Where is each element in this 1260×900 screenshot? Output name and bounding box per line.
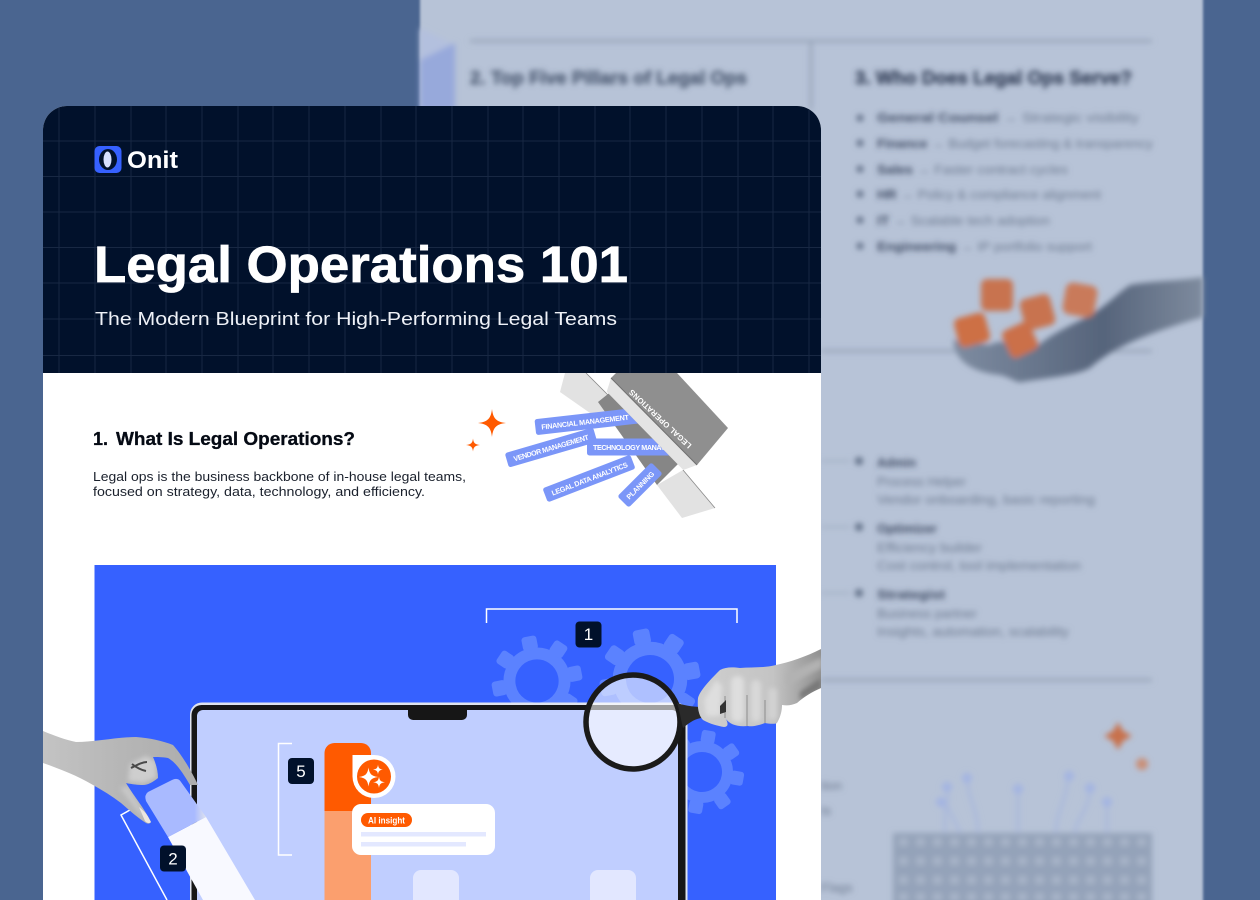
text block: definition: Legal ops is the business backbone of in-house legal teams,: [93, 470, 466, 484]
tab: technology management: TECHNOLOGY MANAGEMENT: [593, 443, 691, 452]
list: maturity stages: Process Helper: [877, 474, 967, 489]
folder front flap: [607, 378, 697, 470]
list: who legal ops serves: HR → Policy & compliance alignment: [877, 187, 1101, 202]
list: maturity stages: Cost control, tool implementation: [877, 558, 1081, 573]
list: maturity stages: Business partner: [877, 606, 978, 621]
icon: gears: [492, 628, 744, 814]
list: who legal ops serves: IT → Scalable tech adoption: [877, 213, 1050, 228]
badge 2: [160, 846, 186, 872]
list: who legal ops serves: General Counsel → Strategic visibility: [877, 110, 1140, 125]
light tile left: [413, 870, 459, 900]
tab: vendor management: [505, 427, 597, 468]
card: AI insight: AI insight: [368, 816, 406, 826]
icon: orange sparkles: [466, 409, 506, 452]
logo: Onit: [127, 147, 178, 174]
title: Legal Operations 101: [94, 236, 628, 293]
light tile right: [590, 870, 636, 900]
heading: top five pillars: 2. Top Five Pillars of Legal Ops: [470, 68, 747, 88]
header band: [43, 106, 821, 373]
back sheet partial labels: ts: [821, 803, 832, 818]
text block: definition: [93, 470, 466, 499]
list: maturity stages: Strategist: [877, 587, 946, 602]
back sheet partial labels: [821, 778, 853, 895]
icon: keyboard: [893, 833, 1152, 900]
list: maturity stages: Vendor onboarding, basic reporting: [877, 492, 1095, 507]
icon: AI sparkle badge: [352, 755, 396, 798]
illustration: legal operations folder with tabs: [505, 373, 728, 518]
tab: planning: PLANNING: [624, 469, 657, 501]
list: maturity stages: Optimizer: [877, 521, 937, 536]
tab: legal data analytics: [542, 455, 636, 502]
tab: technology management: [587, 438, 669, 456]
orange bar chart column: [324, 743, 371, 900]
card: AI insight: [352, 804, 495, 855]
icon: circuit lines: [936, 771, 1112, 832]
list: who legal ops serves: Finance → Budget forecasting & transparency: [877, 136, 1153, 151]
panel: front card: [40, 106, 825, 900]
bracket 1: [486, 609, 737, 623]
logo: [94, 146, 178, 174]
list: maturity stages: Insights, automation, scalability: [877, 624, 1070, 639]
list: maturity stages: [821, 455, 1095, 639]
back sheet blue corner shape: [420, 28, 455, 110]
folder back light panels: [560, 373, 715, 518]
list: who legal ops serves: Engineering → IP portfolio support: [877, 239, 1092, 254]
tab: financial management: FINANCIAL MANAGEMENT: [541, 413, 630, 432]
heading: who does legal ops serve: 3. Who Does Legal Ops Serve?: [855, 68, 1132, 88]
white strip callout 2: [145, 779, 255, 900]
laptop: [190, 702, 688, 900]
panel: blurred back sheet: [420, 0, 1203, 900]
folder label: LEGAL OPERATIONS: [627, 388, 693, 450]
subtitle: The Modern Blueprint for High-Performing Legal Teams: [95, 308, 617, 329]
tab: legal data analytics: LEGAL DATA ANALYTICS: [550, 460, 629, 498]
folder inner shadow: [598, 390, 680, 485]
hand: right: [698, 649, 821, 727]
icon: hand holding cubes: [953, 277, 1203, 382]
icon: back sheet sparkles: [1104, 722, 1148, 770]
back sheet partial labels: tion: [821, 778, 842, 793]
laptop camera notch: [408, 709, 467, 720]
magnifying glass: [586, 675, 703, 769]
list: who legal ops serves: Sales → Faster contract cycles: [877, 162, 1069, 177]
folder top face: [611, 373, 728, 465]
back sheet section dividers: [470, 41, 1152, 680]
list: maturity stages: Admin: [877, 455, 916, 470]
heading: what is legal operations: 1.: [93, 429, 108, 449]
badge 5: 5: [296, 762, 306, 781]
hand: left: [43, 731, 198, 824]
list: who legal ops serves: [856, 110, 1153, 254]
tab: financial management: [534, 409, 638, 435]
badge 5: [288, 758, 314, 784]
badge 1: 1: [584, 625, 593, 644]
text block: definition: focused on strategy, data, technology, and efficiency.: [93, 485, 425, 499]
list: maturity stages: Efficiency builder: [877, 540, 983, 555]
panel: blue illustration: [40, 565, 825, 900]
back sheet partial labels: Flags: [821, 880, 853, 895]
heading: what is legal operations: What Is Legal Operations?: [116, 429, 355, 449]
tabs behind flap: [534, 409, 669, 456]
bracket 2: [121, 808, 167, 900]
badge 1: [576, 622, 602, 648]
tab: vendor management: VENDOR MANAGEMENT: [512, 433, 590, 463]
bracket 5: [278, 744, 292, 855]
badge 2: 2: [168, 850, 178, 868]
tab: planning: [617, 462, 663, 508]
